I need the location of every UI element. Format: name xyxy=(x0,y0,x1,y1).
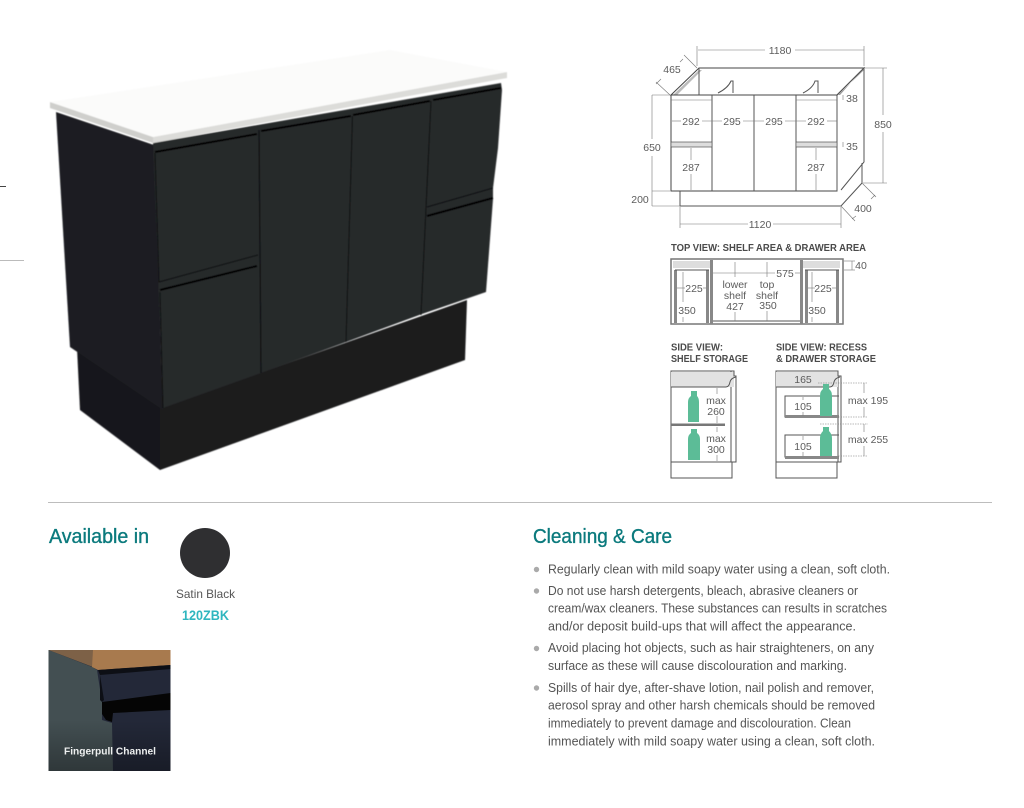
dimension drawing: front view: 1120 xyxy=(749,219,771,231)
icon: bottle lower drawer xyxy=(820,427,832,456)
heading: side view shelf storage: SHELF STORAGE xyxy=(671,354,748,365)
dimension drawing: front view: 35 xyxy=(846,141,858,153)
product photo: black vanity cabinet with white top xyxy=(50,50,507,470)
heading: cleaning and care: Cleaning & Care xyxy=(533,526,672,548)
swatch label: Satin Black xyxy=(176,587,236,601)
care instruction list: and/or deposit build-ups that will affect the appearance. xyxy=(548,620,856,634)
care instruction list xyxy=(534,562,890,748)
dimension drawing: side view recess and drawer storage: 165 xyxy=(794,374,812,386)
heading: side view recess and drawer storage: & DRAWER STORAGE xyxy=(776,354,876,365)
dimension drawing: top view: 350 xyxy=(759,300,777,312)
cabinet side panel xyxy=(56,112,163,410)
dimension drawing: side view recess and drawer storage: max 195 xyxy=(848,395,888,407)
care instruction list: Avoid placing hot objects, such as hair straighteners, on any xyxy=(548,641,875,655)
heading: side view recess and drawer storage: SIDE VIEW: RECESS xyxy=(776,342,867,354)
dimension drawing: top view: 427 xyxy=(726,301,744,313)
dimension drawing: front view: 1180 xyxy=(769,45,791,57)
swatch code: 120ZBK xyxy=(182,608,229,623)
dimension drawing: front view: 287 xyxy=(682,162,700,174)
dimension drawing: front view: 38 xyxy=(846,93,858,105)
dimension drawing: side view recess and drawer storage: 105 xyxy=(794,441,812,453)
heading: side view shelf storage xyxy=(671,342,748,365)
dimension drawing: top view: 225 xyxy=(814,283,832,295)
photo: fingerpull channel detail xyxy=(48,650,170,771)
dimension drawing: front view: 850 xyxy=(874,119,892,131)
dimension drawing: front view: 200 xyxy=(631,194,649,206)
heading: side view recess and drawer storage xyxy=(776,342,876,365)
icon: bottle lower shelf xyxy=(688,429,700,460)
dimension drawing: front view xyxy=(631,45,892,231)
dimension drawing: front view: 295 xyxy=(765,116,783,128)
dimension drawing: side view shelf storage xyxy=(671,371,736,478)
dimension drawing: side view shelf storage: 260 xyxy=(707,406,725,418)
dimension drawing: front view: 650 xyxy=(643,142,661,154)
care instruction list: Regularly clean with mild soapy water using a clean, soft cloth. xyxy=(548,562,890,576)
dimension drawing: top view: top xyxy=(760,279,774,291)
dimension drawing: front view: 400 xyxy=(854,203,872,215)
care instruction list: Do not use harsh detergents, bleach, abrasive cleaners or xyxy=(548,584,858,598)
care instruction list: aerosol spray and other harsh chemicals should be removed xyxy=(548,698,875,712)
dimension drawing: top view: 350 xyxy=(678,305,696,317)
photo caption: Fingerpull Channel xyxy=(64,746,156,758)
dimension drawing: top view: shelf xyxy=(724,290,746,302)
dimension drawing: top view: 575 xyxy=(776,268,794,280)
dimension drawing: front view: 292 xyxy=(682,116,700,128)
door and drawer seams xyxy=(155,101,493,408)
heading: top view: TOP VIEW: SHELF AREA & DRAWER AREA xyxy=(671,243,866,254)
benchtop xyxy=(50,50,507,143)
finger pull channels xyxy=(155,88,501,290)
dimension drawing: top view: 40 xyxy=(855,260,867,272)
dimension drawing: top view: 350 xyxy=(808,305,826,317)
dimension drawing: side view shelf storage: max xyxy=(706,433,727,445)
icon: bottle upper drawer xyxy=(820,384,832,416)
dimension drawing: side view shelf storage: 300 xyxy=(707,444,725,456)
care instruction list: surface as these will cause discolouration and marking. xyxy=(548,659,847,673)
dimension drawing: front view: 287 xyxy=(807,162,825,174)
heading: available in: Available in xyxy=(49,526,149,548)
colour swatch: satin black xyxy=(180,528,230,578)
dimension drawing: front view: 292 xyxy=(807,116,825,128)
dimension drawing: top view: lower xyxy=(722,279,748,291)
cabinet front xyxy=(153,83,502,408)
dimension drawing: front view: 295 xyxy=(723,116,741,128)
plinth base xyxy=(77,300,467,470)
dimension drawing: side view shelf storage: max xyxy=(706,395,727,407)
care instruction list: Spills of hair dye, after-shave lotion, nail polish and remover, xyxy=(548,681,874,695)
heading: side view shelf storage: SIDE VIEW: xyxy=(671,342,723,354)
dimension drawing: top view xyxy=(671,259,867,324)
dimension drawing: side view recess and drawer storage xyxy=(776,371,888,478)
dimension drawing: front view: 465 xyxy=(663,64,681,76)
dimension drawing: side view recess and drawer storage: max 255 xyxy=(848,434,888,446)
dimension drawing: side view recess and drawer storage: 105 xyxy=(794,401,812,413)
care instruction list: immediately to prevent damage and discolouration. Clean xyxy=(548,716,851,730)
dimension drawing: top view: 225 xyxy=(685,283,703,295)
dimension drawing: top view: shelf xyxy=(756,290,778,302)
care instruction list: immediately with mild soapy water using a clean, soft cloth. xyxy=(548,734,875,748)
icon: bottle upper shelf xyxy=(688,391,699,422)
care instruction list: cream/wax cleaners. These substances can results in scratches xyxy=(548,602,887,616)
